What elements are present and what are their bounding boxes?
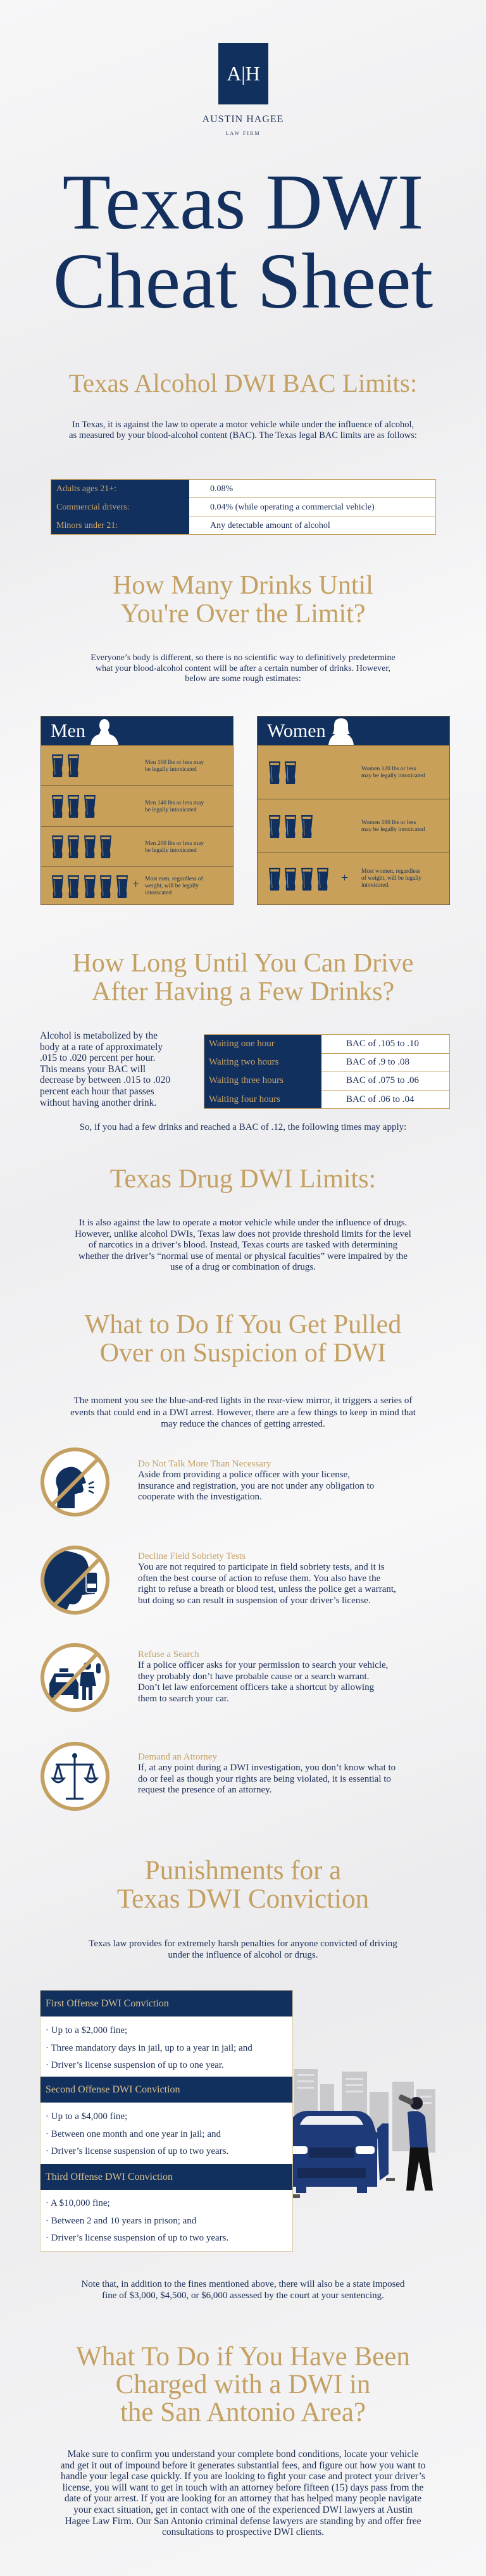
- item: refuse search: [138, 1649, 388, 1704]
- item: decline tests: but doing so can result in suspension of your driver’s license.: [138, 1596, 371, 1606]
- drug paragraph: [75, 1218, 411, 1272]
- BAC table: 0.04% (while operating a commercial vehicle): [210, 503, 375, 512]
- drinks paragraph: Everyone’s body is different, so there is no scientific way to definitively predetermine: [90, 653, 396, 663]
- drinks paragraph: [90, 653, 396, 684]
- metabolism text: .015 to .020 percent per hour.: [40, 1053, 156, 1063]
- waiting table: BAC of .06 to .04: [346, 1094, 414, 1104]
- punishments table: · Driver’s license suspension of up to two years.: [46, 2146, 228, 2156]
- illustration: city and drunk driver: [293, 2069, 435, 2198]
- closing paragraph: date of your arrest. If you are looking for an attorney that has helped many people navigate: [65, 2493, 421, 2504]
- punishments table: · Between one month and one year in jail; and: [46, 2129, 221, 2139]
- punishments table: · Up to a $4,000 fine;: [46, 2111, 127, 2122]
- item: refuse search: them to search your car.: [138, 1694, 229, 1704]
- women rows: may be legally intoxicated: [361, 773, 425, 779]
- panel: women: [257, 716, 450, 905]
- firm sub: LAW FIRM: [225, 130, 261, 136]
- pulled over paragraph: events that could end in a DWI arrest. However, there are a few things to keep in mind that: [70, 1408, 416, 1418]
- closing paragraph: consultations to prospective DWI clients.: [162, 2527, 324, 2537]
- BAC table: [51, 479, 436, 535]
- drug paragraph: However, unlike alcohol DWIs, Texas law does not provide threshold limits for the level: [75, 1229, 411, 1239]
- drug paragraph: use of a drug or combination of drugs.: [170, 1262, 316, 1272]
- item: refuse search: they probably don’t have probable cause or a search warrant.: [138, 1672, 369, 1682]
- logo: [202, 43, 284, 136]
- drinks paragraph: below are some rough estimates:: [185, 674, 301, 684]
- closing paragraph: and get it out of impound before it generates substantial fees, and figure out how you want to: [61, 2460, 425, 2471]
- item: decline tests: [138, 1551, 396, 1606]
- heading: how long: After Having a Few Drinks?: [92, 977, 394, 1006]
- logo box: A|H: [227, 62, 260, 85]
- third offense: Third Offense DWI Conviction: [46, 2172, 173, 2182]
- pulled over paragraph: The moment you see the blue-and-red lights in the rear-view mirror, it triggers a series of: [74, 1396, 412, 1406]
- title: Texas DWI: [63, 159, 423, 246]
- drug paragraph: of narcotics in a driver’s blood. Instead, Texas courts are tasked with determining: [89, 1240, 397, 1250]
- drug paragraph: whether the driver’s “normal use of mental or physical faculties” were impaired by the: [78, 1251, 408, 1261]
- panel: men: Most men, regardless of: [145, 876, 203, 882]
- punishments paragraph: [89, 1939, 397, 1960]
- heading: how many drinks: You're Over the Limit?: [120, 599, 366, 628]
- note: BAC .12: So, if you had a few drinks and reached a BAC of .12, the following times may apply:: [80, 1122, 406, 1132]
- men header: Men: [51, 720, 85, 741]
- waiting table: Waiting two hours: [209, 1057, 278, 1067]
- closing paragraph: [61, 2449, 425, 2537]
- item: refuse search: Refuse a Search: [138, 1649, 199, 1660]
- icon: man silhouette: [90, 719, 118, 745]
- metabolism text: decrease by between .015 to .020: [40, 1075, 170, 1085]
- closing paragraph: handle your legal case quickly. If you are looking to fight your case and protect your driver’s: [61, 2471, 425, 2482]
- BAC table: Adults ages 21+:: [56, 484, 116, 494]
- pulled over paragraph: [70, 1396, 416, 1429]
- metabolism text: percent each hour that passes: [40, 1086, 154, 1097]
- panel: men: [40, 716, 234, 905]
- panel: women: +: [341, 871, 348, 885]
- icon: no talking: [40, 1447, 109, 1516]
- heading: how many drinks: How Many Drinks Until: [113, 571, 373, 600]
- heading: pulled over: Over on Suspicion of DWI: [100, 1339, 386, 1368]
- women rows: [258, 745, 449, 799]
- drinks paragraph: what your blood-alcohol content will be after a certain number of drinks. However,: [96, 663, 390, 673]
- item: refuse search: If a police officer asks for your permission to search your vehicle,: [138, 1660, 388, 1670]
- metabolism text: This means your BAC will: [40, 1064, 146, 1075]
- drug paragraph: It is also against the law to operate a motor vehicle while under the influence of drugs.: [79, 1218, 407, 1228]
- waiting table: BAC of .9 to .08: [346, 1057, 409, 1067]
- panel: women: of weight, will be legally: [361, 875, 421, 882]
- icon: sobriety test: [40, 1546, 109, 1615]
- heading: charged in San Antonio: What To Do if You Have Been: [76, 2342, 410, 2372]
- punishments paragraph: under the influence of alcohol or drugs.: [168, 1950, 318, 1960]
- intro paragraph: In Texas, it is against the law to operate a motor vehicle while under the influence of alcohol,: [72, 420, 414, 430]
- item: attorney: [138, 1752, 396, 1795]
- women rows: Women 120 lbs or less: [361, 766, 416, 772]
- BAC table: Any detectable amount of alcohol: [210, 521, 330, 530]
- first offense: [40, 1991, 292, 2016]
- heading: drug limits: Texas Drug DWI Limits:: [110, 1165, 376, 1194]
- closing paragraph: Hagee Law Firm. Our San Antonio criminal defense lawyers are standing by and offer free: [65, 2516, 421, 2527]
- heading: pulled over: [85, 1310, 401, 1368]
- panel: women: intoxicated.: [361, 882, 390, 889]
- closing paragraph: license, you will want to get in touch with an attorney before fifteen (15) days pass from the: [63, 2482, 423, 2493]
- second offense: Second Offense DWI Conviction: [46, 2084, 180, 2095]
- item: attorney: request the presence of an attorney.: [138, 1785, 271, 1795]
- heading: how long: [72, 949, 414, 1006]
- waiting table: BAC of .075 to .06: [346, 1075, 419, 1085]
- icon: woman silhouette: [328, 718, 354, 745]
- state fine note: Note that, in addition to the fines mentioned above, there will also be a state imposed: [81, 2279, 405, 2289]
- punishments table: · A $10,000 fine;: [46, 2198, 110, 2208]
- BAC table: Commercial drivers:: [56, 503, 129, 512]
- title: [53, 159, 433, 325]
- item: do not talk: cooperate with the investigation.: [138, 1492, 262, 1502]
- heading: how long: How Long Until You Can Drive: [72, 949, 414, 978]
- item: do not talk: [138, 1459, 374, 1502]
- panel: men: Men 140 lbs or less may: [145, 800, 204, 806]
- pulled over paragraph: may reduce the chances of getting arrested.: [161, 1419, 325, 1429]
- punishments table: · Up to a $2,000 fine;: [46, 2025, 127, 2035]
- item: decline tests: You are not required to participate in field sobriety tests, and it is: [138, 1562, 385, 1572]
- waiting table: [204, 1034, 450, 1109]
- panel: men: intoxicated: [145, 890, 171, 896]
- intro paragraph: [69, 420, 417, 441]
- punishments table: [40, 1990, 293, 2252]
- third offense: [40, 2164, 292, 2190]
- second offense: [40, 2077, 292, 2103]
- firm name: AUSTIN HAGEE: [202, 114, 284, 125]
- item: attorney: do or feel as though your rights are being violated, it is essential to: [138, 1774, 391, 1784]
- heading: charged in San Antonio: Charged with a DWI in: [116, 2370, 370, 2399]
- icon: refuse search: [40, 1643, 109, 1712]
- logo box: [218, 43, 268, 104]
- state fine note: [81, 2279, 405, 2301]
- first offense: First Offense DWI Conviction: [46, 1998, 169, 2009]
- waiting table: Waiting one hour: [209, 1039, 275, 1049]
- waiting table: Waiting four hours: [209, 1094, 280, 1104]
- heading: charged in San Antonio: [76, 2342, 410, 2427]
- panel: women: Women 180 lbs or less: [361, 820, 416, 826]
- state fine note: fine of $3,000, $4,500, or $6,000 assessed by the court at your sentencing.: [102, 2291, 384, 2301]
- item: decline tests: right to refuse a breath or blood test, unless the police get a warrant,: [138, 1584, 396, 1594]
- heading: punishments: Texas DWI Conviction: [117, 1884, 369, 1914]
- heading: charged in San Antonio: the San Antonio Area?: [120, 2398, 366, 2427]
- panel: women: may be legally intoxicated: [361, 827, 425, 833]
- men header: [41, 716, 233, 745]
- punishments table: · Between 2 and 10 years in prison; and: [46, 2215, 196, 2225]
- waiting table: Waiting three hours: [209, 1075, 284, 1085]
- item: attorney: Demand an Attorney: [138, 1752, 217, 1762]
- metabolism text: [40, 1030, 170, 1108]
- item: do not talk: Do Not Talk More Than Necessary: [138, 1459, 271, 1469]
- item: decline tests: Decline Field Sobriety Tests: [138, 1551, 246, 1561]
- item: do not talk: Aside from providing a police officer with your license,: [138, 1470, 350, 1480]
- punishments paragraph: Texas law provides for extremely harsh penalties for anyone convicted of driving: [89, 1939, 397, 1949]
- closing paragraph: your exact situation, get in contact with one of the experienced DWI lawyers at Austin: [73, 2504, 413, 2515]
- BAC table: 0.08%: [210, 484, 233, 494]
- heading: how many drinks: [113, 571, 373, 628]
- punishments table: · Three mandatory days in jail, up to a year in jail; and: [46, 2043, 252, 2053]
- title: Cheat Sheet: [53, 238, 433, 325]
- panel: men: Men 200 lbs or less may: [145, 841, 204, 847]
- item: decline tests: often the best course of action to refuse them. You also have the: [138, 1573, 380, 1584]
- heading: punishments: [117, 1856, 369, 1914]
- heading: punishments: Punishments for a: [145, 1856, 341, 1885]
- metabolism text: body at a rate of approximately: [40, 1042, 163, 1053]
- metabolism text: without having another drink.: [40, 1097, 156, 1108]
- item: refuse search: Don’t let law enforcement officers take a shortcut by allowing: [138, 1682, 374, 1692]
- panel: women: Most women, regardless: [361, 868, 420, 875]
- punishments table: · Driver’s license suspension of up to one year.: [46, 2060, 224, 2070]
- punishments table: · Driver’s license suspension of up to two years.: [46, 2233, 228, 2243]
- item: do not talk: insurance and registration, you are not under any obligation to: [138, 1481, 374, 1491]
- heading: alcohol limits: Texas Alcohol DWI BAC Limits:: [69, 368, 417, 397]
- women header: Women: [267, 720, 326, 741]
- item: attorney: If, at any point during a DWI investigation, you don’t know what to: [138, 1763, 396, 1773]
- closing paragraph: Make sure to confirm you understand your complete bond conditions, locate your vehicle: [68, 2449, 418, 2460]
- women header: [258, 716, 449, 745]
- panel: men: weight, will be legally: [145, 883, 199, 889]
- men rows: be legally intoxicated: [145, 766, 197, 773]
- heading: pulled over: What to Do If You Get Pulled: [85, 1310, 401, 1339]
- icon: scales: [40, 1742, 109, 1811]
- men rows: Men 100 lbs or less may: [145, 760, 204, 766]
- panel: men: be legally intoxicated: [145, 847, 197, 854]
- metabolism text: Alcohol is metabolized by the: [40, 1030, 158, 1041]
- panel: men: be legally intoxicated: [145, 807, 197, 813]
- waiting table: BAC of .105 to .10: [346, 1039, 419, 1049]
- men rows: [41, 745, 233, 785]
- BAC table: Minors under 21:: [56, 521, 118, 530]
- intro paragraph: as measured by your blood-alcohol content (BAC). The Texas legal BAC limits are as follows:: [69, 430, 417, 441]
- panel: men: +: [132, 877, 139, 891]
